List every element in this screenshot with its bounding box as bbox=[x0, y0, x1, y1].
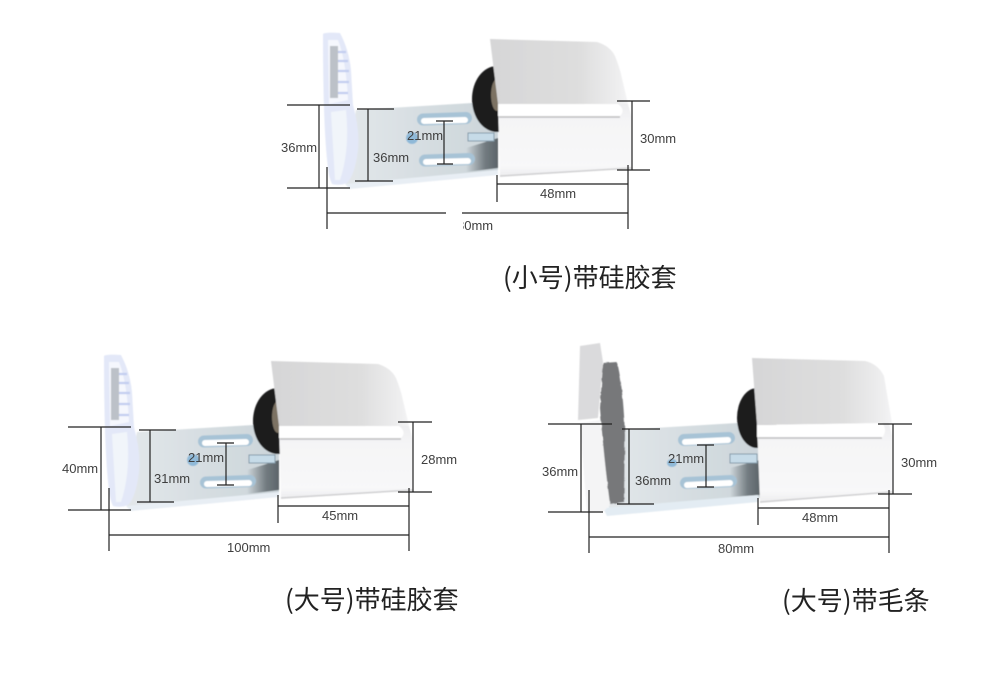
dimension labels: 31mm bbox=[154, 471, 190, 486]
mounting slots bbox=[204, 440, 250, 482]
metal cover bbox=[490, 39, 628, 104]
dimension labels: 30mm bbox=[640, 131, 676, 146]
silicone sleeve bbox=[104, 355, 139, 507]
product photo: large door stop with felt strip bbox=[578, 343, 892, 516]
dimension labels: 36mm bbox=[542, 464, 578, 479]
black rubber wheel bbox=[472, 66, 522, 132]
mounting slots bbox=[423, 118, 469, 160]
dimension labels: 48mm bbox=[540, 186, 576, 201]
product photo: large door stop with silicone sleeve bbox=[104, 355, 413, 511]
metal cover bbox=[752, 358, 892, 425]
dimension labels bbox=[62, 450, 457, 555]
bracket plate bbox=[608, 423, 760, 510]
silicone sleeve bbox=[323, 33, 358, 185]
bracket plate bbox=[126, 425, 279, 510]
title: large size silicone: (大号)带硅胶套 bbox=[285, 580, 459, 617]
dimension labels: 40mm bbox=[62, 461, 98, 476]
dimension labels: 21mm bbox=[188, 450, 224, 465]
mounting slots bbox=[684, 438, 731, 483]
title: large size felt: (大号)带毛条 bbox=[782, 581, 930, 618]
dimension lines bbox=[287, 101, 650, 229]
product photo: small door stop with silicone sleeve bbox=[323, 33, 632, 189]
dimension labels: 30mm bbox=[901, 455, 937, 470]
metal cover bbox=[271, 361, 409, 426]
dimension labels: 21mm bbox=[407, 128, 443, 143]
dimension labels bbox=[542, 451, 937, 556]
dimension labels bbox=[281, 128, 676, 233]
title: small size: (小号)带硅胶套 bbox=[503, 258, 677, 295]
dimension labels: 28mm bbox=[421, 452, 457, 467]
panel: large size with felt strip bbox=[542, 343, 937, 618]
dimension labels: 100mm bbox=[227, 540, 270, 555]
dimension labels: 36mm bbox=[373, 150, 409, 165]
dimension labels: 36mm bbox=[281, 140, 317, 155]
white L-shaped end plate bbox=[580, 420, 610, 513]
panel: large size with silicone sleeve bbox=[62, 355, 459, 617]
dimension lines bbox=[68, 422, 432, 551]
end plate top face bbox=[578, 343, 603, 420]
black rubber wheel bbox=[737, 388, 777, 448]
dimension labels: 80mm bbox=[718, 541, 754, 556]
bracket plate bbox=[345, 103, 498, 188]
dimension labels: 80mm bbox=[457, 218, 493, 233]
dimension labels: 48mm bbox=[802, 510, 838, 525]
black rubber wheel bbox=[253, 388, 303, 454]
panel: small size with silicone sleeve bbox=[281, 33, 677, 295]
dimension labels: 45mm bbox=[322, 508, 358, 523]
dimension labels: 21mm bbox=[668, 451, 704, 466]
dimension lines bbox=[548, 424, 912, 553]
dimension labels: 36mm bbox=[635, 473, 671, 488]
grey felt strip bbox=[600, 362, 625, 504]
